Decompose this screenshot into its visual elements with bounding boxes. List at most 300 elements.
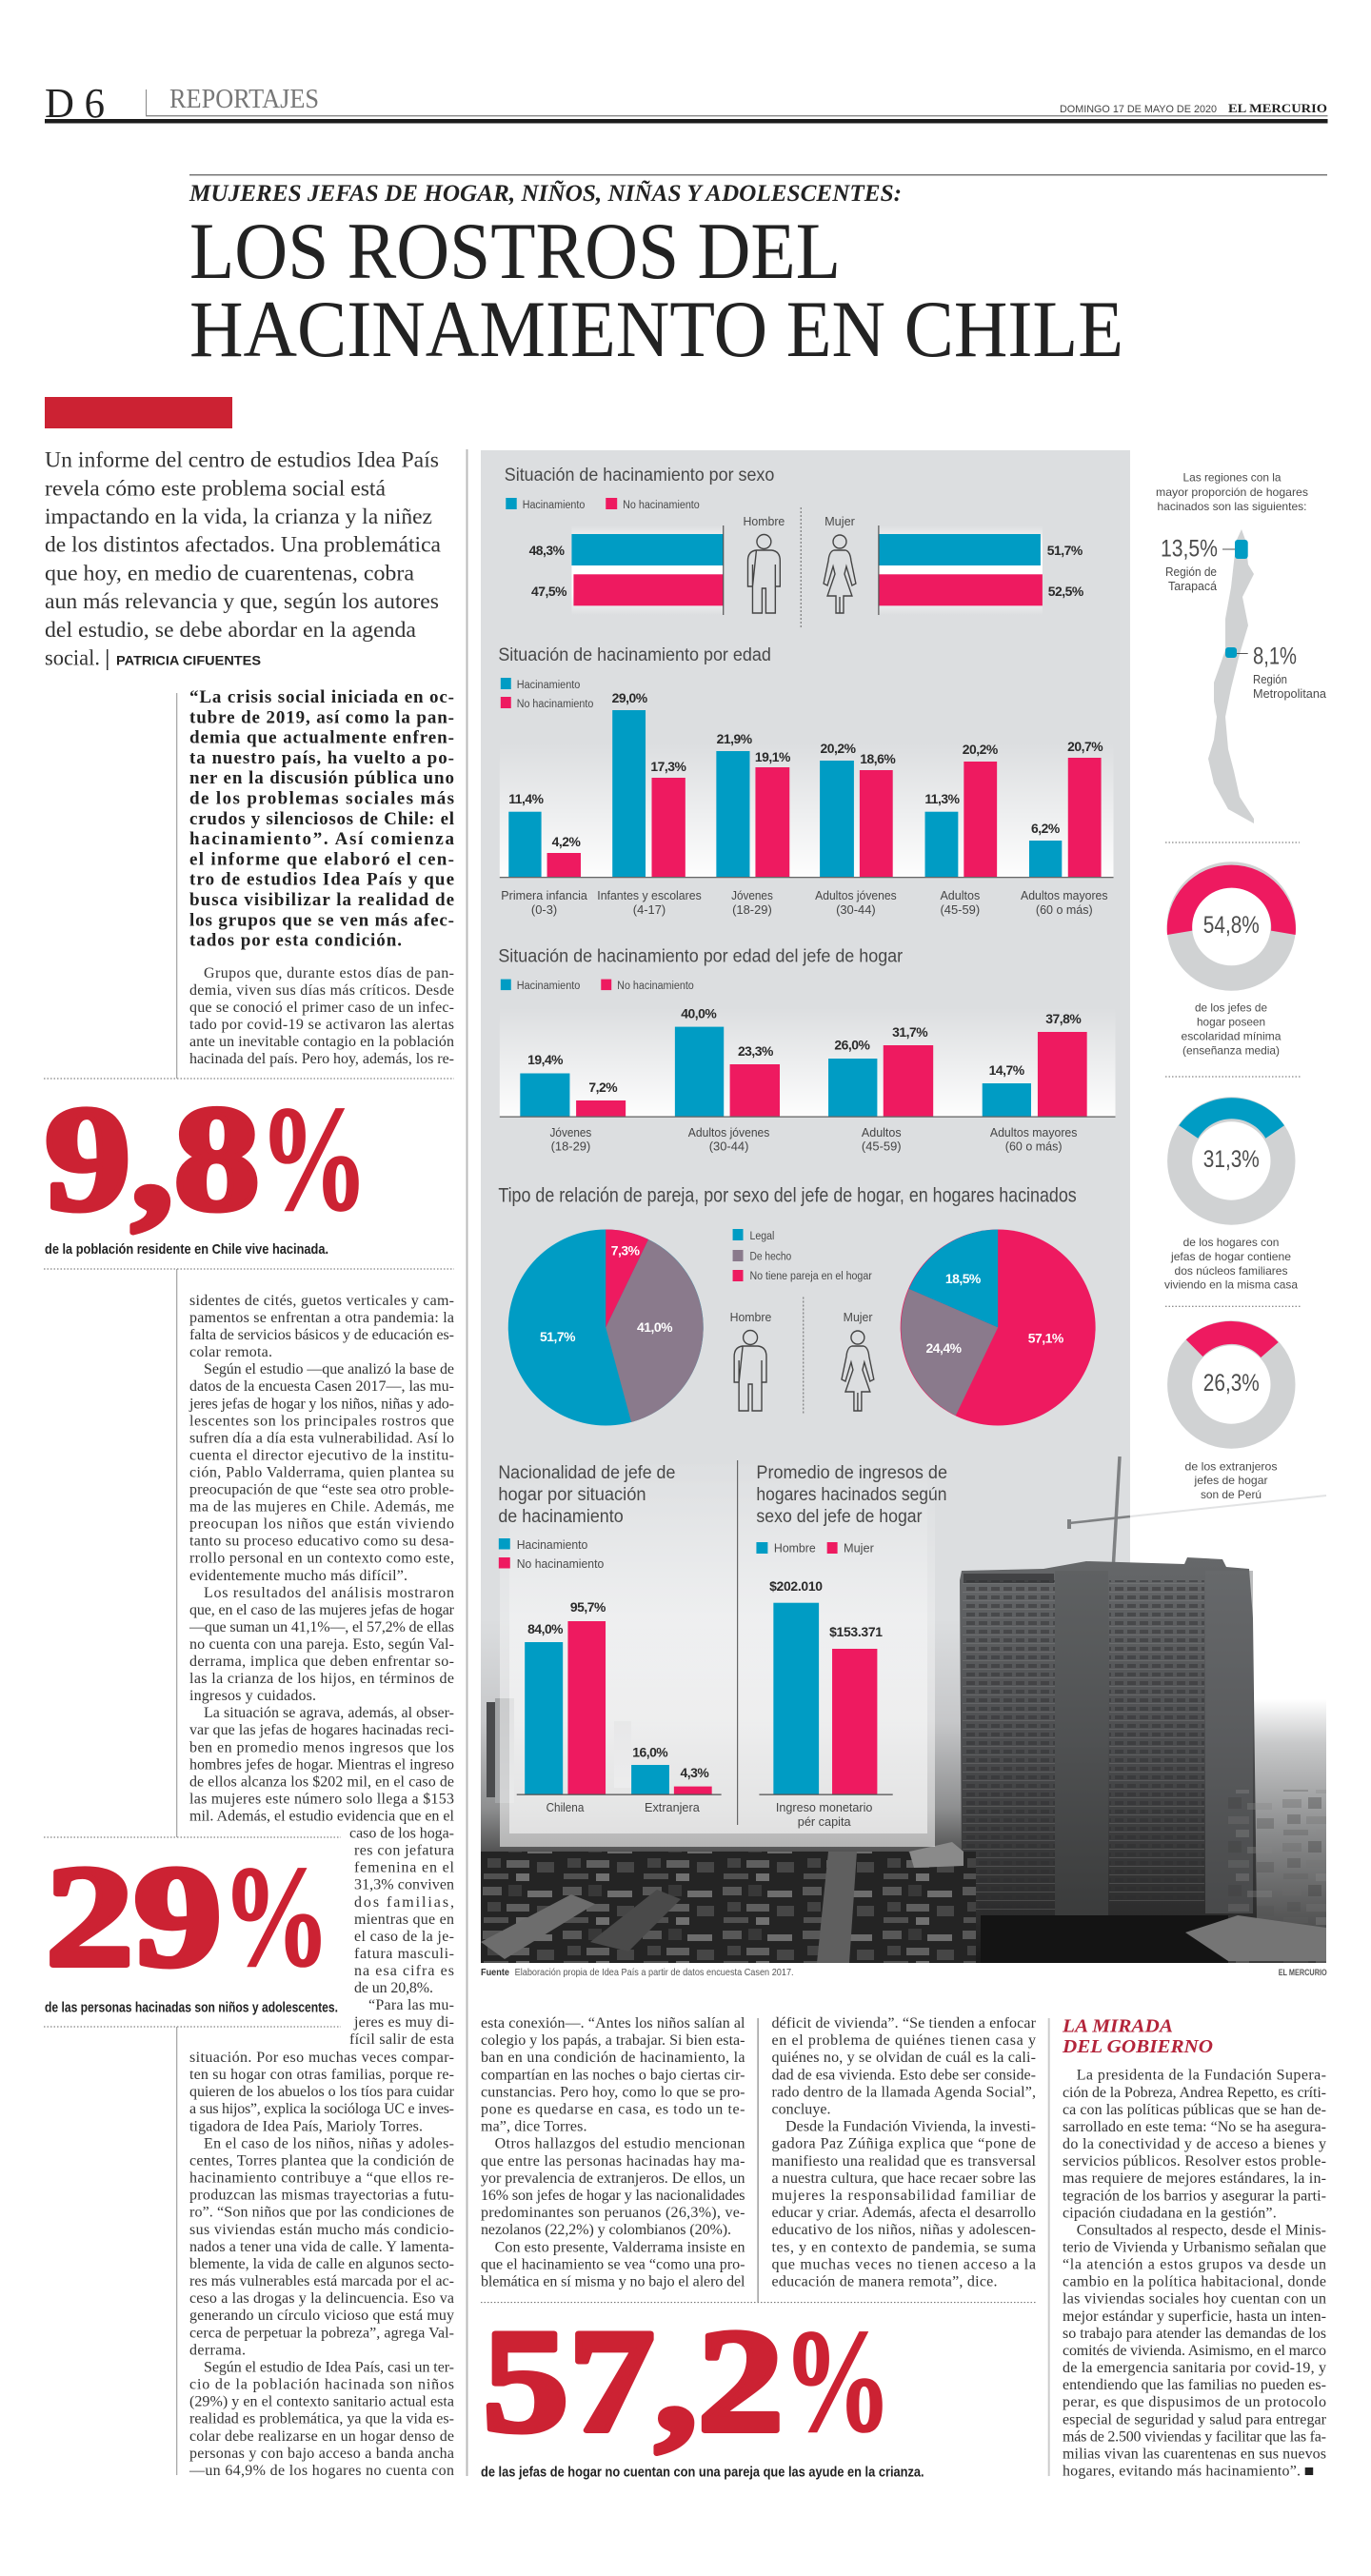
lead paragraph: de los distintos afectados. Una problemática — [45, 533, 441, 557]
body text: main column: ceso a las drogas y la delincuencia. Eso va — [189, 2290, 454, 2307]
sidebar text: “la atención a estos grupos va desde un — [1063, 2257, 1326, 2273]
title: LOS ROSTROS DEL — [189, 207, 841, 296]
body text: opening: hacinada del país. Pero hoy, además, los re- — [189, 1051, 454, 1067]
callout: 29% — [44, 1836, 341, 2027]
sidebar text: entendiendo que las familias no pueden es- — [1063, 2377, 1326, 2393]
region: Tarapacá: Región de — [1165, 565, 1217, 579]
chart: nacionalidad: 95,7% — [570, 1599, 606, 1615]
body text: opening: demia, viven sus días más críticos. Desde — [189, 982, 454, 999]
body text: opening — [189, 965, 454, 1067]
body text: main column: En el caso de los niños, niñas y adoles- — [204, 2135, 454, 2151]
lead paragraph — [45, 448, 441, 670]
kicker: MUJERES JEFAS DE HOGAR, NIÑOS, NIÑAS Y ADOLESCENTES: — [189, 180, 902, 207]
body text: main column: tanto su proceso educativo como su desa- — [189, 1534, 454, 1550]
donut: 31,3%: 31,3% — [1203, 1146, 1260, 1173]
body text: main column: —un 64,9% de los hogares no cuenta con — [189, 2463, 454, 2479]
body text: main column: femenina en el — [354, 1860, 455, 1876]
deck paragraph: el informe que elaboró el cen- — [189, 849, 454, 869]
chart: hacinamiento por sexo: 48,3% — [529, 543, 566, 558]
body text: main column: nados a tener una vida de calle. Y lamenta- — [189, 2239, 454, 2255]
chart: hacinamiento por edad: Primera infancia — [501, 888, 588, 902]
deck paragraph: tro de estudios Idea País y que — [189, 870, 454, 890]
body text: main column: blemente, la vida de calle en algunos secto- — [189, 2256, 454, 2272]
body text: main column: ben en promedio menos ingresos que los — [189, 1739, 454, 1755]
chart: hacinamiento por edad: 6,2% — [1031, 821, 1061, 836]
body text: main column: preocupación de que “este sea otro proble- — [189, 1481, 454, 1498]
chart title: Tipo de relación de pareja, por sexo del jefe de hogar, en hogares hacinados — [498, 1184, 1077, 1207]
chart: tipo de relación de pareja: Mujer — [844, 1310, 873, 1324]
source line: Fuente — [481, 1967, 509, 1978]
body text: main column: var que las jefas de hogares hacinadas reci- — [189, 1722, 454, 1738]
body text: main column: dos familias, — [354, 1894, 454, 1911]
body text: second column — [481, 2015, 745, 2290]
chart: hacinamiento por edad — [498, 644, 1114, 917]
body text: main column: falta de servicios básicos y de educación es- — [189, 1327, 454, 1343]
donut: 31,3%: viviendo en la misma casa — [1164, 1278, 1298, 1292]
deck paragraph: ner en la discusión pública uno — [189, 768, 454, 788]
map intro — [1156, 471, 1308, 513]
source line: EL MERCURIO — [1279, 1968, 1327, 1978]
chart: nacionalidad — [498, 1462, 722, 1814]
body text: main column: tigadora de Idea País, Marioly Torres. — [189, 2118, 423, 2134]
donut: 54,8%: escolaridad mínima — [1181, 1030, 1282, 1043]
body text: main column: colar debe realizarse en un hogar denso de — [189, 2428, 454, 2445]
body text: main column: situación. Por eso muchas veces compar- — [189, 2050, 454, 2066]
pie: mujer: 57,1% — [1028, 1331, 1064, 1346]
chart: hacinamiento por edad: (0-3) — [531, 902, 557, 917]
callout: 9,8% — [44, 1076, 454, 1269]
chart title: hogares hacinados según — [756, 1484, 946, 1505]
chart: promedio de ingresos: Ingreso monetario — [776, 1800, 872, 1814]
body text: second column: predominantes son peruanos (26,3%), ve- — [481, 2205, 745, 2221]
body text: main column: ten su hogar con otras familias, porque re- — [189, 2067, 454, 2083]
body text: main column: no cuenta con una pareja. Esto, según Val- — [189, 1636, 454, 1653]
lead paragraph: del estudio, se debe abordar en la agenda — [45, 618, 416, 642]
body text: opening: Grupos que, durante estos días de pan- — [204, 965, 454, 981]
pie: hombre: 7,3% — [611, 1243, 641, 1258]
crane — [1069, 1456, 1326, 1571]
chart: hacinamiento por edad: 29,0% — [612, 690, 648, 705]
body text: third column: Desde la Fundación Vivienda, la investi- — [785, 2119, 1036, 2135]
body text: main column: Los resultados del análisis mostraron — [204, 1585, 454, 1601]
body text: main column: jeres jefas de hogar y los niños, niñas y ado- — [189, 1396, 454, 1412]
body text: second column: 16% son jefes de hogar y las nacionalidades — [481, 2188, 745, 2204]
chart: hacinamiento por edad: 11,3% — [924, 791, 961, 806]
body text: third column: educación de manera remota”, dice. — [771, 2273, 998, 2290]
legend: No hacinamiento — [623, 498, 700, 511]
map intro: mayor proporción de hogares — [1156, 485, 1308, 499]
legend: No hacinamiento — [517, 697, 594, 710]
region: Tarapacá: 13,5% — [1161, 536, 1218, 563]
body text: main column: que, en el caso de las mujeres jefas de hogar — [189, 1602, 455, 1618]
chart: hacinamiento por sexo: 47,5% — [531, 584, 567, 599]
map intro: Las regiones con la — [1182, 471, 1282, 485]
sidebar text: comités de vivienda. Asimismo, en el marco — [1063, 2343, 1326, 2359]
callout: 57,2% — [481, 2299, 1036, 2481]
lead paragraph: Un informe del centro de estudios Idea País — [45, 448, 439, 472]
chart: hacinamiento por sexo: 51,7% — [1047, 543, 1083, 558]
chart: hacinamiento por edad: 11,4% — [508, 791, 545, 806]
sidebar text: cipación ciudadana en la gestión”. — [1063, 2205, 1277, 2221]
region: Tarapacá — [1161, 536, 1218, 593]
chart: hacinamiento por edad: 4,2% — [552, 834, 581, 849]
photo: tower and settlement — [481, 1456, 1326, 1963]
body text: main column: las mujeres este número solo llega a $153 — [189, 1791, 454, 1807]
body text: second column: Otros hallazgos del estudio mencionan — [495, 2136, 745, 2152]
sidebar text: milias vivan las cuarentenas en sus nuevos — [1063, 2447, 1326, 2462]
lead paragraph: revela cómo este problema social está — [45, 476, 386, 500]
sidebar text: perar, es que dispusimos de un protocolo — [1063, 2394, 1326, 2410]
region: Metropolitana: Metropolitana — [1253, 686, 1327, 701]
column rules — [176, 449, 1050, 2476]
sidebar text: mas requiere de mejores estándares, la in- — [1063, 2170, 1326, 2187]
body text: main column: na esa cifra es — [354, 1963, 454, 1979]
body text: second column: Con esto presente, Valderrama insiste en — [495, 2239, 745, 2255]
body text: main column: las la crianza de los hijos, en términos de — [189, 1671, 454, 1687]
body text: main column: el caso de la je- — [354, 1929, 454, 1945]
sidebar article: la mirada del gobierno — [1062, 2016, 1327, 2479]
page number: D 6 — [45, 80, 105, 127]
body text: third column: quiénes no, y se olvidan de cuál es la cali- — [771, 2050, 1036, 2066]
deck paragraph: busca visibilizar la realidad de — [189, 890, 454, 910]
big number: 57,2 — [483, 2299, 784, 2463]
legend — [499, 1537, 604, 1571]
title — [189, 207, 1123, 374]
big number — [483, 2299, 892, 2463]
legend: Hacinamiento — [517, 979, 581, 992]
translucent chart backing — [500, 1456, 935, 1847]
body text: main column: centes, Torres plantea que la condición de — [189, 2153, 454, 2169]
body text: opening: que se conoció el primer caso de un infec- — [189, 1000, 454, 1016]
callout caption: de la población residente en Chile vive hacinada. — [45, 1241, 328, 1258]
body text: main column: sufren día a día esta vulnerabilidad. Así lo — [189, 1430, 454, 1446]
chart: promedio de ingresos: $153.371 — [829, 1624, 883, 1639]
sidebar text: de la emergencia sanitaria por covid-19, y — [1063, 2360, 1326, 2376]
body text: main column: hombres jefes de hogar. Mientras el ingreso — [189, 1756, 454, 1773]
grey infographic panel — [481, 450, 1130, 1631]
body text: second column: esta conexión—. “Antes los niños salían al — [481, 2015, 745, 2031]
body text: main column: ingresos y cuidados. — [189, 1688, 316, 1704]
deck paragraph: ta nuestro país, ha vuelto a po- — [189, 748, 454, 768]
big number: % — [259, 1076, 368, 1242]
body text: main column: pamentos se enfrentan a otra pandemia: la — [189, 1310, 454, 1326]
pie: mujer: 24,4% — [926, 1340, 963, 1356]
donut: 26,3%: 26,3% — [1203, 1370, 1260, 1397]
chart: hacinamiento por edad del jefe de hogar: 23,3% — [738, 1043, 774, 1059]
body text: main column: ción, Pablo Valderrama, quien plantea su — [189, 1464, 454, 1481]
title: HACINAMIENTO EN CHILE — [189, 285, 1123, 374]
donut: 54,8%: hogar poseen — [1197, 1016, 1265, 1029]
chart title: sexo del jefe de hogar — [756, 1506, 923, 1527]
body text: third column: educativo de los niños, niñas y adolescen- — [771, 2222, 1036, 2238]
body text: main column: generando un círculo vicioso que está muy — [189, 2308, 454, 2324]
chart: hacinamiento por edad: (60 o más) — [1036, 902, 1093, 917]
donut: 54,8%: 54,8% — [1203, 912, 1260, 939]
sidebar text: tegración de los barrios y asegurar la parti- — [1063, 2188, 1326, 2204]
donut: 31,3%: de los hogares con — [1183, 1236, 1279, 1249]
donut: 54,8%: de los jefes de — [1195, 1001, 1267, 1014]
chart: hacinamiento por edad del jefe de hogar: 14,7% — [989, 1062, 1025, 1078]
headline block — [189, 174, 1327, 374]
body text: third column: que muchas veces no tienen acceso a la — [771, 2256, 1036, 2272]
chart: hacinamiento por edad: Jóvenes — [731, 888, 773, 902]
body text: main column: datos de la encuesta Casen 2017—, las mu- — [189, 1378, 454, 1395]
callout caption: de las jefas de hogar no cuentan con una pareja que las ayude en la crianza. — [481, 2464, 924, 2481]
legend: Hombre — [774, 1540, 816, 1556]
body text: second column: que entre las personas hacinadas hay ma- — [481, 2153, 745, 2170]
region: Metropolitana: 8,1% — [1253, 644, 1297, 670]
chart: hacinamiento por edad: Adultos — [940, 888, 981, 902]
sidebar text: las viviendas sociales hoy cuentan con un — [1063, 2291, 1326, 2308]
body text: main column: de un 20,8%. — [354, 1980, 433, 1996]
chart: nacionalidad: 4,3% — [681, 1765, 709, 1780]
chart title: Situación de hacinamiento por edad — [498, 644, 771, 665]
icon: woman — [842, 1331, 874, 1411]
chart title: Situación de hacinamiento por edad del jefe de hogar — [498, 946, 904, 967]
newspaper name: EL MERCURIO — [1228, 102, 1327, 115]
chart: hacinamiento por edad del jefe de hogar: 37,8% — [1045, 1011, 1082, 1026]
settlement rooftops — [481, 1790, 1326, 1963]
pie: mujer — [901, 1230, 1096, 1426]
sidebar text: mejor estándar y superficie, hasta un inten- — [1063, 2308, 1326, 2325]
body text: main column: (29%) y en el contexto sanitario actual esta — [189, 2394, 454, 2410]
source line — [481, 1967, 1327, 1978]
body text: third column: mujeres la responsabilidad familiar de — [771, 2188, 1036, 2204]
date: DOMINGO 17 DE MAYO DE 2020 — [1060, 104, 1217, 115]
body text: main column: fatura masculi- — [354, 1946, 454, 1962]
body text: main column: produzcan las mismas trayectorias a futu- — [189, 2188, 454, 2204]
body text: main column: preocupan los niños que están viviendo — [189, 1516, 454, 1533]
chart: tipo de relación de pareja: Hombre — [730, 1310, 771, 1324]
deck paragraph: los grupos que se ven más afec- — [189, 910, 454, 930]
red accent block — [45, 397, 232, 428]
body text: main column: quieren de los abuelos o los tíos para cuidar — [189, 2084, 455, 2100]
chart title: Situación de hacinamiento por sexo — [505, 465, 774, 485]
body text: main column: mientras que en — [354, 1912, 454, 1928]
body text: third column: educar y criar. Además, afecta el desarrollo — [771, 2205, 1036, 2221]
body text: third column: rado dentro de la llamada Agenda Social”, — [771, 2084, 1036, 2100]
chart: hacinamiento por edad del jefe de hogar: (30-44) — [709, 1139, 748, 1154]
big number: % — [783, 2299, 892, 2463]
chart: hacinamiento por edad: 20,2% — [821, 741, 857, 756]
big number — [46, 1836, 330, 1996]
body text: main column: cio de la población hacinada son niños — [189, 2376, 454, 2393]
chart: tipo de relación de pareja — [498, 1184, 1096, 1426]
chart: hacinamiento por edad: (45-59) — [941, 902, 980, 917]
body text: main column: res más vulnerables está marcada por el ac- — [189, 2273, 454, 2289]
body text: second column: colegio y los papás, a trabajar. Si bien esta- — [481, 2032, 745, 2049]
chart: hacinamiento por sexo — [505, 465, 1084, 628]
body text: main column: derrama, implica que deben enfrentar so- — [189, 1654, 454, 1670]
legend: Legal — [749, 1229, 774, 1242]
body text: main column: fícil salir de esta — [349, 2031, 454, 2048]
chart: hacinamiento por edad del jefe de hogar: (45-59) — [862, 1139, 902, 1154]
body text: second column: que el hacinamiento se vea “como una pro- — [481, 2256, 745, 2272]
sidebar: map of Chile — [1156, 471, 1327, 823]
chart: hacinamiento por edad: Adultos jóvenes — [815, 888, 897, 902]
sidebar heading — [1062, 2016, 1213, 2057]
sidebar text: do la conectividad y de acceso a bienes y — [1063, 2136, 1326, 2152]
lead paragraph: social. — [45, 645, 100, 670]
donut: 26,3%: jefes de hogar — [1193, 1474, 1268, 1487]
chart: hacinamiento por edad del jefe de hogar: Adultos mayores — [990, 1125, 1078, 1139]
chart: hacinamiento por edad del jefe de hogar: 40,0% — [681, 1006, 717, 1021]
body text: main column: Según el estudio de Idea País, casi un ter- — [204, 2359, 454, 2375]
sidebar text: especial de seguridad y salud para entregar — [1063, 2411, 1327, 2427]
sidebar text: ca con las políticas públicas que se han de- — [1063, 2102, 1326, 2118]
legend: No hacinamiento — [617, 979, 694, 992]
legend — [506, 498, 700, 511]
body text: main column: de ellos alcanza los $202 mil, en el caso de — [189, 1773, 454, 1790]
pie: hombre: 41,0% — [637, 1319, 673, 1335]
body text: third column: gadora Paz Zúñiga explica que “pone de — [771, 2136, 1036, 2152]
body text: main column: ma de las mujeres en Chile. Además, me — [189, 1499, 454, 1516]
chart: hacinamiento por edad del jefe de hogar: (18-29) — [551, 1139, 590, 1154]
body text: main column: rrollo personal en un contexto como este, — [189, 1551, 454, 1567]
body text: third column: concluye. — [771, 2102, 830, 2117]
big number — [45, 1076, 368, 1242]
donut: 31,3%: jefas de hogar contiene — [1170, 1250, 1291, 1263]
chart: hacinamiento por sexo: 52,5% — [1048, 584, 1084, 599]
legend — [756, 1540, 874, 1556]
chart: hacinamiento por edad del jefe de hogar — [498, 946, 1116, 1154]
chart: hacinamiento por edad del jefe de hogar: (60 o más) — [1005, 1139, 1062, 1154]
chart: hacinamiento por sexo: Mujer — [825, 514, 856, 528]
body text: second column: nezolanos (22,2%) y colombianos (20%). — [481, 2222, 731, 2238]
chart: hacinamiento por edad del jefe de hogar: 26,0% — [834, 1037, 870, 1053]
legend — [733, 1229, 872, 1282]
donut: 54,8% — [1167, 865, 1296, 1057]
sidebar text: sarrollado en este tema: “No se ha asegura- — [1063, 2119, 1326, 2135]
chart: hacinamiento por edad: 19,1% — [755, 749, 791, 764]
pie: mujer: 18,5% — [945, 1271, 982, 1286]
legend: Mujer — [844, 1540, 874, 1556]
sidebar text: más de 2.500 viviendas y facilitar que las fa- — [1063, 2428, 1326, 2445]
body text: third column: a nuestra cultura, que hace recaer sobre las — [771, 2170, 1036, 2187]
chart: hacinamiento por edad: Infantes y escolares — [597, 888, 702, 902]
body text: third column: dad de esa vivienda. Esto debe ser conside- — [771, 2067, 1036, 2083]
chart: hacinamiento por edad del jefe de hogar: 19,4% — [527, 1052, 564, 1067]
body text: main column: jeres es muy di- — [353, 2014, 454, 2031]
body text: third column — [771, 2015, 1037, 2290]
big number: 9,8 — [45, 1076, 260, 1242]
sidebar text: servicios públicos. Resolver estos proble- — [1063, 2153, 1326, 2170]
body text: main column: cerca de perpetuar la pobreza”, agrega Val- — [189, 2325, 454, 2341]
chart: nacionalidad: Extranjera — [645, 1800, 701, 1814]
chart: promedio de ingresos: $202.010 — [769, 1578, 823, 1594]
deck paragraph: crudos y silenciosos de Chile: el — [189, 809, 454, 829]
body text: second column: compartían en las noches o bajo ciertas cir- — [481, 2067, 745, 2083]
body text: main column: a sus hijos”, explica la socióloga UC e inves- — [189, 2101, 454, 2117]
region: Tarapacá: Tarapacá — [1168, 579, 1218, 593]
icon: man — [734, 1331, 766, 1411]
deck paragraph: “La crisis social iniciada en oc- — [189, 687, 454, 707]
lead paragraph: que hoy, en medio de cuarentenas, cobra — [45, 561, 414, 585]
legend: Hacinamiento — [523, 498, 586, 511]
donut: 26,3%: son de Perú — [1201, 1488, 1262, 1501]
section name: REPORTAJES — [169, 84, 319, 114]
chart title: hogar por situación — [498, 1484, 646, 1505]
chart: hacinamiento por edad: (18-29) — [732, 902, 772, 917]
donut: 31,3%: dos núcleos familiares — [1175, 1264, 1287, 1278]
sidebar text: terio de Vivienda y Urbanismo señalan que — [1063, 2239, 1326, 2256]
body text: second column: yor prevalencia de extranjeros. De ellos, un — [481, 2170, 745, 2187]
chart: nacionalidad: 16,0% — [632, 1745, 668, 1760]
body text: main column: La situación se agrava, además, al obser- — [204, 1705, 454, 1721]
chart title: Promedio de ingresos de — [756, 1462, 947, 1483]
chart: promedio de ingresos — [756, 1462, 947, 1829]
legend — [501, 678, 594, 710]
deck paragraph: tados por esta condición. — [189, 931, 402, 951]
body text: main column: res con jefatura — [354, 1843, 454, 1859]
chart: promedio de ingresos: pér capita — [798, 1814, 851, 1829]
sidebar text: ción de la Pobreza, Andrea Repetto, es críti- — [1063, 2085, 1326, 2101]
sidebar text — [1063, 2068, 1327, 2479]
body text: second column: pone es quedarse en casa, es todo un te- — [481, 2102, 745, 2117]
chart: hacinamiento por edad del jefe de hogar: 31,7% — [892, 1024, 928, 1040]
body text: main column: hacinamiento contribuye a “que ellos re- — [189, 2170, 454, 2187]
chart: hacinamiento por edad del jefe de hogar: Adultos — [862, 1125, 902, 1139]
donut: 26,3% — [1180, 1321, 1283, 1501]
body text: main column: sidentes de cités, guetos verticales y cam- — [189, 1293, 454, 1309]
chart: hacinamiento por edad: 20,7% — [1067, 739, 1103, 754]
body text: opening: ante un inevitable contagio en la población — [189, 1034, 454, 1050]
sidebar heading: LA MIRADA — [1062, 2016, 1173, 2037]
body text: main column: ro”. “Son niños que por las condiciones de — [189, 2205, 454, 2221]
chart: hacinamiento por edad del jefe de hogar: 7,2% — [588, 1080, 618, 1095]
sidebar text: La presidenta de la Fundación Supera- — [1077, 2068, 1326, 2084]
page header — [45, 80, 1327, 127]
chart: hacinamiento por edad: Adultos mayores — [1021, 888, 1108, 902]
body text: opening: tado por covid-19 se activaron las alertas — [189, 1017, 454, 1033]
lead paragraph: PATRICIA CIFUENTES — [116, 653, 261, 668]
sidebar text: cambio en la política habitacional, donde — [1063, 2274, 1326, 2290]
deck paragraph — [189, 687, 455, 951]
legend — [501, 979, 694, 992]
chart title — [756, 1462, 947, 1527]
body text: second column: ban en una condición de hacinamiento, la — [481, 2050, 745, 2066]
sidebar text: hogares, evitando más hacinamiento”. — [1063, 2464, 1301, 2479]
body text: main column — [189, 1293, 455, 2479]
donut: 31,3% — [1164, 1098, 1298, 1292]
body text: main column: personas y con bajo acceso a banda ancha — [189, 2446, 454, 2462]
sidebar heading: DEL GOBIERNO — [1062, 2037, 1213, 2057]
chart: nacionalidad: 84,0% — [527, 1621, 564, 1636]
body text: main column: mil. Además, el estudio evidencia que en el — [189, 1809, 455, 1824]
chart title: de hacinamiento — [498, 1506, 624, 1527]
chart: hacinamiento por edad: (4-17) — [633, 902, 666, 917]
body text: main column: 31,3% conviven — [354, 1877, 454, 1893]
body text: third column: déficit de vivienda”. “Se tienden a enfocar — [771, 2015, 1037, 2031]
deck paragraph: de los problemas sociales más — [189, 788, 454, 809]
map intro: hacinados son las siguientes: — [1158, 500, 1306, 513]
lead paragraph: aun más relevancia y que, según los autores — [45, 589, 439, 613]
chart: hacinamiento por edad del jefe de hogar: Jóvenes — [550, 1125, 592, 1139]
big number: 29 — [46, 1836, 222, 1996]
body text: main column: colar remota. — [189, 1344, 272, 1360]
tower — [960, 1557, 1257, 1923]
pie: hombre: 51,7% — [540, 1329, 576, 1344]
legend: No hacinamiento — [517, 1556, 604, 1571]
donut: 54,8%: (enseñanza media) — [1182, 1043, 1280, 1057]
chart title — [498, 1462, 675, 1527]
chart: hacinamiento por edad: 20,2% — [963, 742, 999, 757]
legend: Hacinamiento — [517, 1537, 587, 1552]
chart: hacinamiento por edad: (30-44) — [836, 902, 876, 917]
body text: main column: Según el estudio —que analizó la base de — [204, 1361, 454, 1377]
lead paragraph: impactando en la vida, la crianza y la niñez — [45, 505, 432, 528]
body text: main column: evidentemente mucho más difícil”. — [189, 1568, 407, 1584]
